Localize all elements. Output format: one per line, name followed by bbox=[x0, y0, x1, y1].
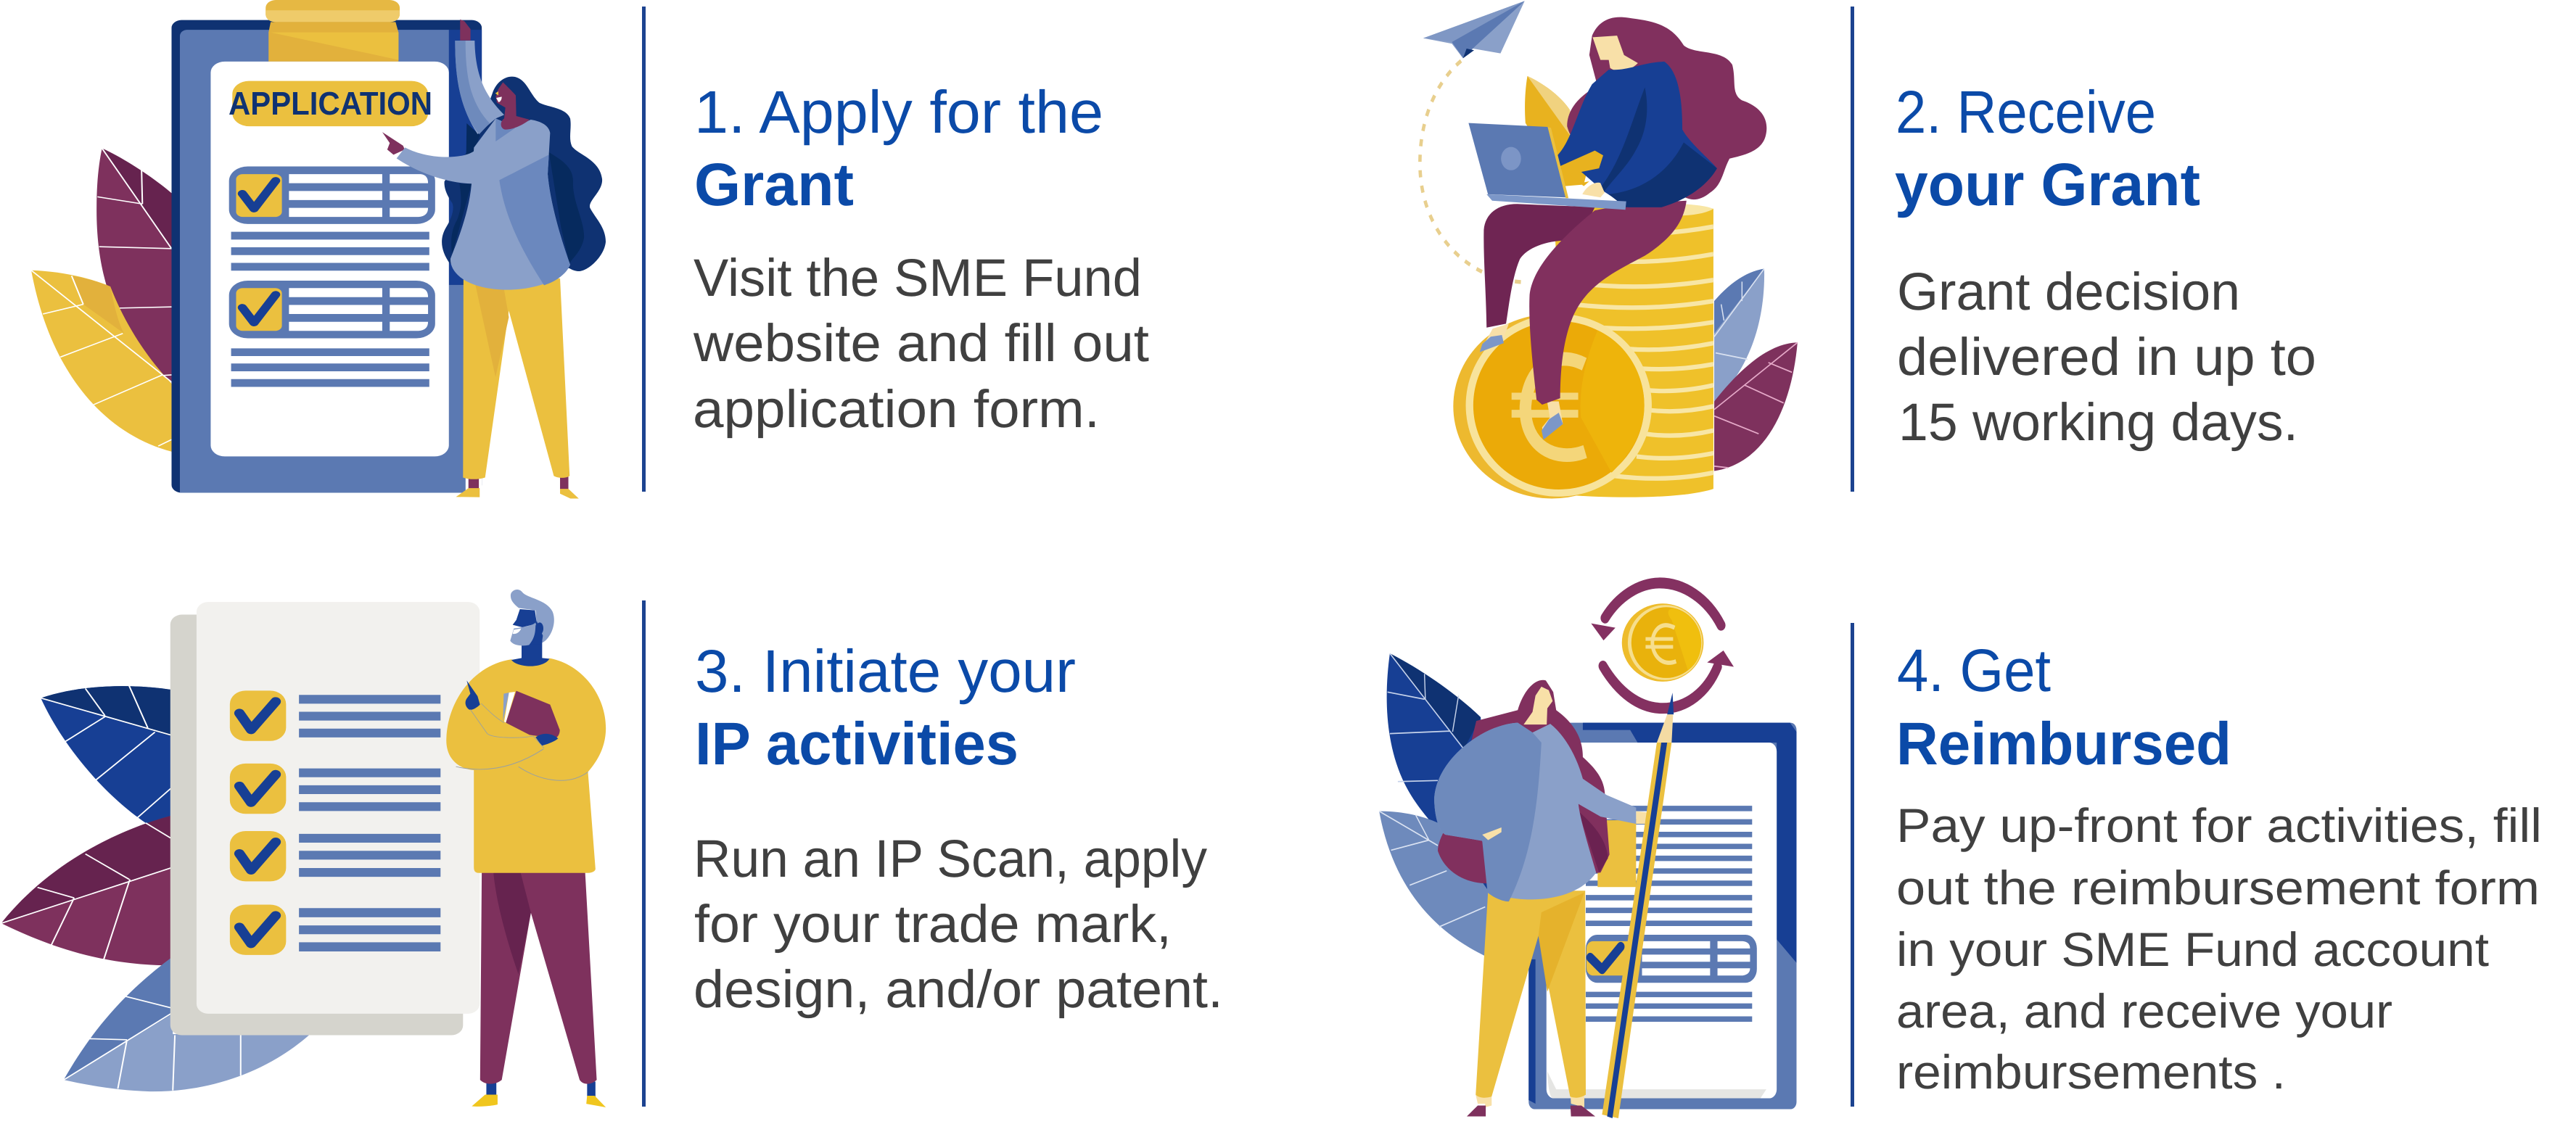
icon: maroon leaf bbox=[96, 148, 173, 384]
yellow block on form bbox=[1597, 820, 1636, 887]
text: step 1 description: application form. bbox=[693, 380, 1100, 439]
application label text: APPLICATION bbox=[229, 85, 432, 122]
illustration: woman with laptop on coin stack bbox=[1420, 1, 1798, 498]
checklist item 2 bbox=[230, 764, 440, 814]
icon: euro coin bbox=[1622, 603, 1703, 682]
heading: step 2: 2. Receive bbox=[1896, 78, 2156, 146]
dashed flight path bbox=[1420, 61, 1524, 282]
text: step 1 description bbox=[693, 249, 1149, 439]
heading: step 4 bbox=[1896, 637, 2231, 777]
heading: step 3 bbox=[695, 637, 1076, 777]
panel: step 2 receive bbox=[1420, 1, 2316, 498]
icon: blue leaf bbox=[1714, 269, 1764, 402]
icon: light blue leaf bbox=[1379, 811, 1488, 957]
woman figure bbox=[1434, 680, 1653, 1116]
icon: pencil bbox=[1602, 693, 1674, 1118]
text: step 2 description: delivered in up to bbox=[1897, 328, 2316, 387]
icon: maroon leaf bbox=[1714, 342, 1798, 471]
icon: paper plane bbox=[1423, 1, 1525, 58]
text: step 2 description: 15 working days. bbox=[1898, 393, 2298, 452]
icon: yellow leaf bbox=[31, 270, 171, 452]
text: step 4 description: out the reimbursement form bbox=[1896, 861, 2540, 914]
man head, hands and book bbox=[466, 590, 560, 748]
clipboard clip bbox=[266, 0, 400, 62]
woman seated bbox=[1480, 17, 1766, 439]
form row 1 bbox=[229, 166, 435, 224]
divider bbox=[642, 600, 646, 1107]
form check row bbox=[1586, 935, 1757, 983]
panel: step 3 initiate bbox=[1, 590, 1223, 1107]
heading: step 4: Reimbursed bbox=[1896, 710, 2231, 777]
text lines 1 bbox=[231, 232, 429, 270]
checklist item 1 bbox=[230, 690, 440, 741]
heading: step 1 bbox=[694, 78, 1103, 218]
text: step 1 description: website and fill out bbox=[693, 314, 1149, 373]
checklist item 3 bbox=[230, 831, 440, 881]
heading: step 1: 1. Apply for the bbox=[694, 78, 1103, 146]
text: step 4 description: in your SME Fund account bbox=[1896, 922, 2489, 976]
clipboard board bbox=[171, 20, 482, 492]
divider bbox=[1851, 7, 1854, 492]
text: step 2 description: Grant decision bbox=[1897, 263, 2240, 321]
woman hand pointing bbox=[382, 132, 405, 154]
checklist item 4 bbox=[230, 904, 440, 955]
text: step 4 description bbox=[1896, 798, 2542, 1099]
woman hand raised bbox=[460, 20, 471, 41]
man sweater bbox=[446, 658, 606, 873]
woman legs bbox=[456, 278, 579, 498]
heading: step 2 bbox=[1895, 78, 2200, 218]
woman upper body bbox=[397, 41, 606, 290]
icon: maroon leaf bbox=[1, 815, 173, 965]
form row 2 bbox=[229, 281, 435, 338]
form board bbox=[1528, 723, 1796, 1109]
divider bbox=[642, 7, 646, 492]
icon: light blue leaf bbox=[64, 957, 310, 1091]
illustration: woman with pencil, form and euro coin bbox=[1379, 583, 1796, 1118]
text: step 3 description: Run an IP Scan, apply bbox=[694, 830, 1207, 888]
heading: step 4: 4. Get bbox=[1897, 637, 2051, 704]
back sheet bbox=[170, 615, 463, 1035]
panel: step 1 apply bbox=[31, 0, 1149, 498]
text: step 4 description: Pay up-front for activities, fill bbox=[1896, 798, 2542, 852]
panel: step 4 reimbursed bbox=[1379, 583, 2542, 1118]
text: step 2 description bbox=[1897, 263, 2316, 452]
application label background bbox=[232, 81, 428, 126]
text: step 4 description: area, and receive your bbox=[1896, 984, 2392, 1038]
icon: circular arrows bbox=[1591, 583, 1734, 708]
icon: laptop bbox=[1468, 123, 1626, 210]
text: step 3 description: for your trade mark, bbox=[694, 895, 1172, 954]
heading: step 3: IP activities bbox=[695, 710, 1019, 777]
icon: dark blue leaf bbox=[1387, 653, 1488, 891]
divider bbox=[1851, 623, 1854, 1107]
icon: big euro coin bbox=[1453, 314, 1652, 498]
icon: dark blue leaf bbox=[41, 686, 173, 823]
text: step 1 description: Visit the SME Fund bbox=[694, 249, 1142, 307]
form lines bbox=[1586, 806, 1752, 1022]
heading: step 3: 3. Initiate your bbox=[695, 637, 1076, 705]
icon: yellow leaf behind bbox=[1525, 76, 1589, 186]
illustration: checklist and man bbox=[1, 590, 606, 1107]
heading: step 1: Grant bbox=[694, 151, 854, 218]
illustration: clipboard with application form and woman bbox=[31, 0, 606, 498]
text: step 3 description bbox=[694, 830, 1223, 1019]
front sheet bbox=[197, 602, 480, 1014]
text: step 3 description: design, and/or patent. bbox=[694, 960, 1223, 1019]
text: step 4 description: reimbursements . bbox=[1896, 1045, 2286, 1099]
coin stack bbox=[1553, 203, 1713, 497]
text lines 2 bbox=[231, 348, 429, 387]
heading: step 2: your Grant bbox=[1895, 151, 2200, 218]
form sheet bbox=[210, 62, 449, 456]
man legs and feet bbox=[472, 870, 606, 1107]
